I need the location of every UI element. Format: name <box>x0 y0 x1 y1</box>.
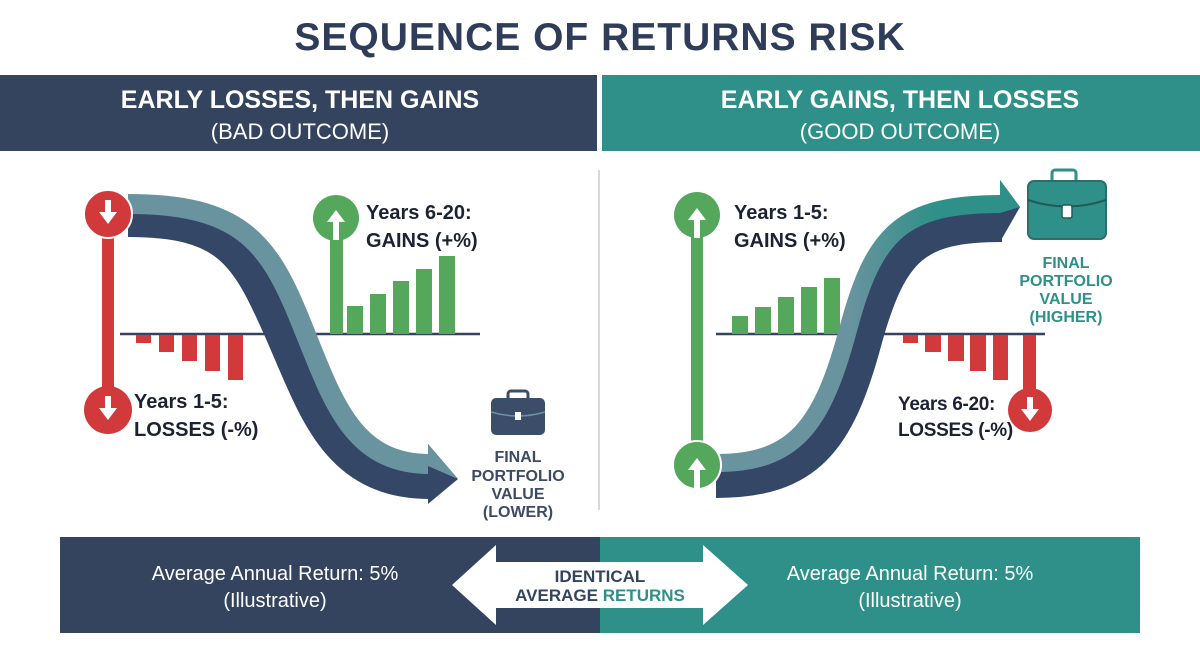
icon: red vertical loss bar <box>84 190 132 434</box>
panel header: good outcome <box>602 75 1200 151</box>
panel header: bad outcome: (BAD OUTCOME) <box>211 119 389 144</box>
label: final portfolio higher: (HIGHER) <box>1030 309 1102 326</box>
panel: right chart <box>673 170 1113 489</box>
label: years 6-20 losses: Years 6-20: <box>898 394 995 415</box>
label: final portfolio higher: PORTFOLIO <box>1019 273 1113 290</box>
panel header: good outcome: (GOOD OUTCOME) <box>800 119 1000 144</box>
bottom banner <box>60 537 1140 633</box>
icon: red down circle <box>1008 388 1052 432</box>
double arrow: identical average returns: IDENTICAL <box>555 567 645 586</box>
icon: green up circle <box>313 195 359 241</box>
double arrow: identical average returns: AVERAGE RETURNS <box>515 586 685 605</box>
label: years 1-5 gains: Years 1-5: <box>734 202 829 224</box>
label: years 6-20 gains: Years 6-20: <box>366 202 472 224</box>
red loss bars <box>136 335 243 380</box>
double arrow: identical average returns <box>452 545 748 625</box>
icon: green vertical gain bar <box>673 192 721 489</box>
text: left average: (Illustrative) <box>223 590 327 612</box>
label: years 6-20 gains: GAINS (+%) <box>366 230 478 252</box>
panel header: good outcome: EARLY GAINS, THEN LOSSES <box>721 86 1079 114</box>
red loss bars <box>903 335 1036 405</box>
arrow: downward curve <box>128 204 458 504</box>
label: years 1-5 losses: Years 1-5: <box>134 391 229 413</box>
label: years 1-5 losses: LOSSES (-%) <box>134 419 258 441</box>
green gain bars <box>330 238 455 334</box>
label: final portfolio lower: FINAL <box>494 449 542 466</box>
label: final portfolio higher: FINAL <box>1042 255 1090 272</box>
label: final portfolio lower: VALUE <box>491 486 545 503</box>
icon: briefcase navy <box>491 391 545 435</box>
label: final portfolio higher: VALUE <box>1039 291 1093 308</box>
title: SEQUENCE OF RETURNS RISK <box>294 16 906 59</box>
panel header: bad outcome <box>0 75 597 151</box>
label: years 1-5 gains: GAINS (+%) <box>734 230 846 252</box>
icon: briefcase teal <box>1028 170 1106 239</box>
label: years 6-20 losses: LOSSES (-%) <box>898 420 1013 441</box>
panel header: bad outcome: EARLY LOSSES, THEN GAINS <box>121 86 479 114</box>
text: right average: Average Annual Return: 5% <box>787 563 1033 585</box>
label: final portfolio lower: PORTFOLIO <box>471 468 565 485</box>
text: right average: (Illustrative) <box>858 590 962 612</box>
text: left average: Average Annual Return: 5% <box>152 563 398 585</box>
arrow: upward curve <box>716 180 1020 478</box>
label: final portfolio lower: (LOWER) <box>483 504 553 521</box>
panel: left chart <box>84 190 565 521</box>
green gain bars <box>732 278 840 334</box>
